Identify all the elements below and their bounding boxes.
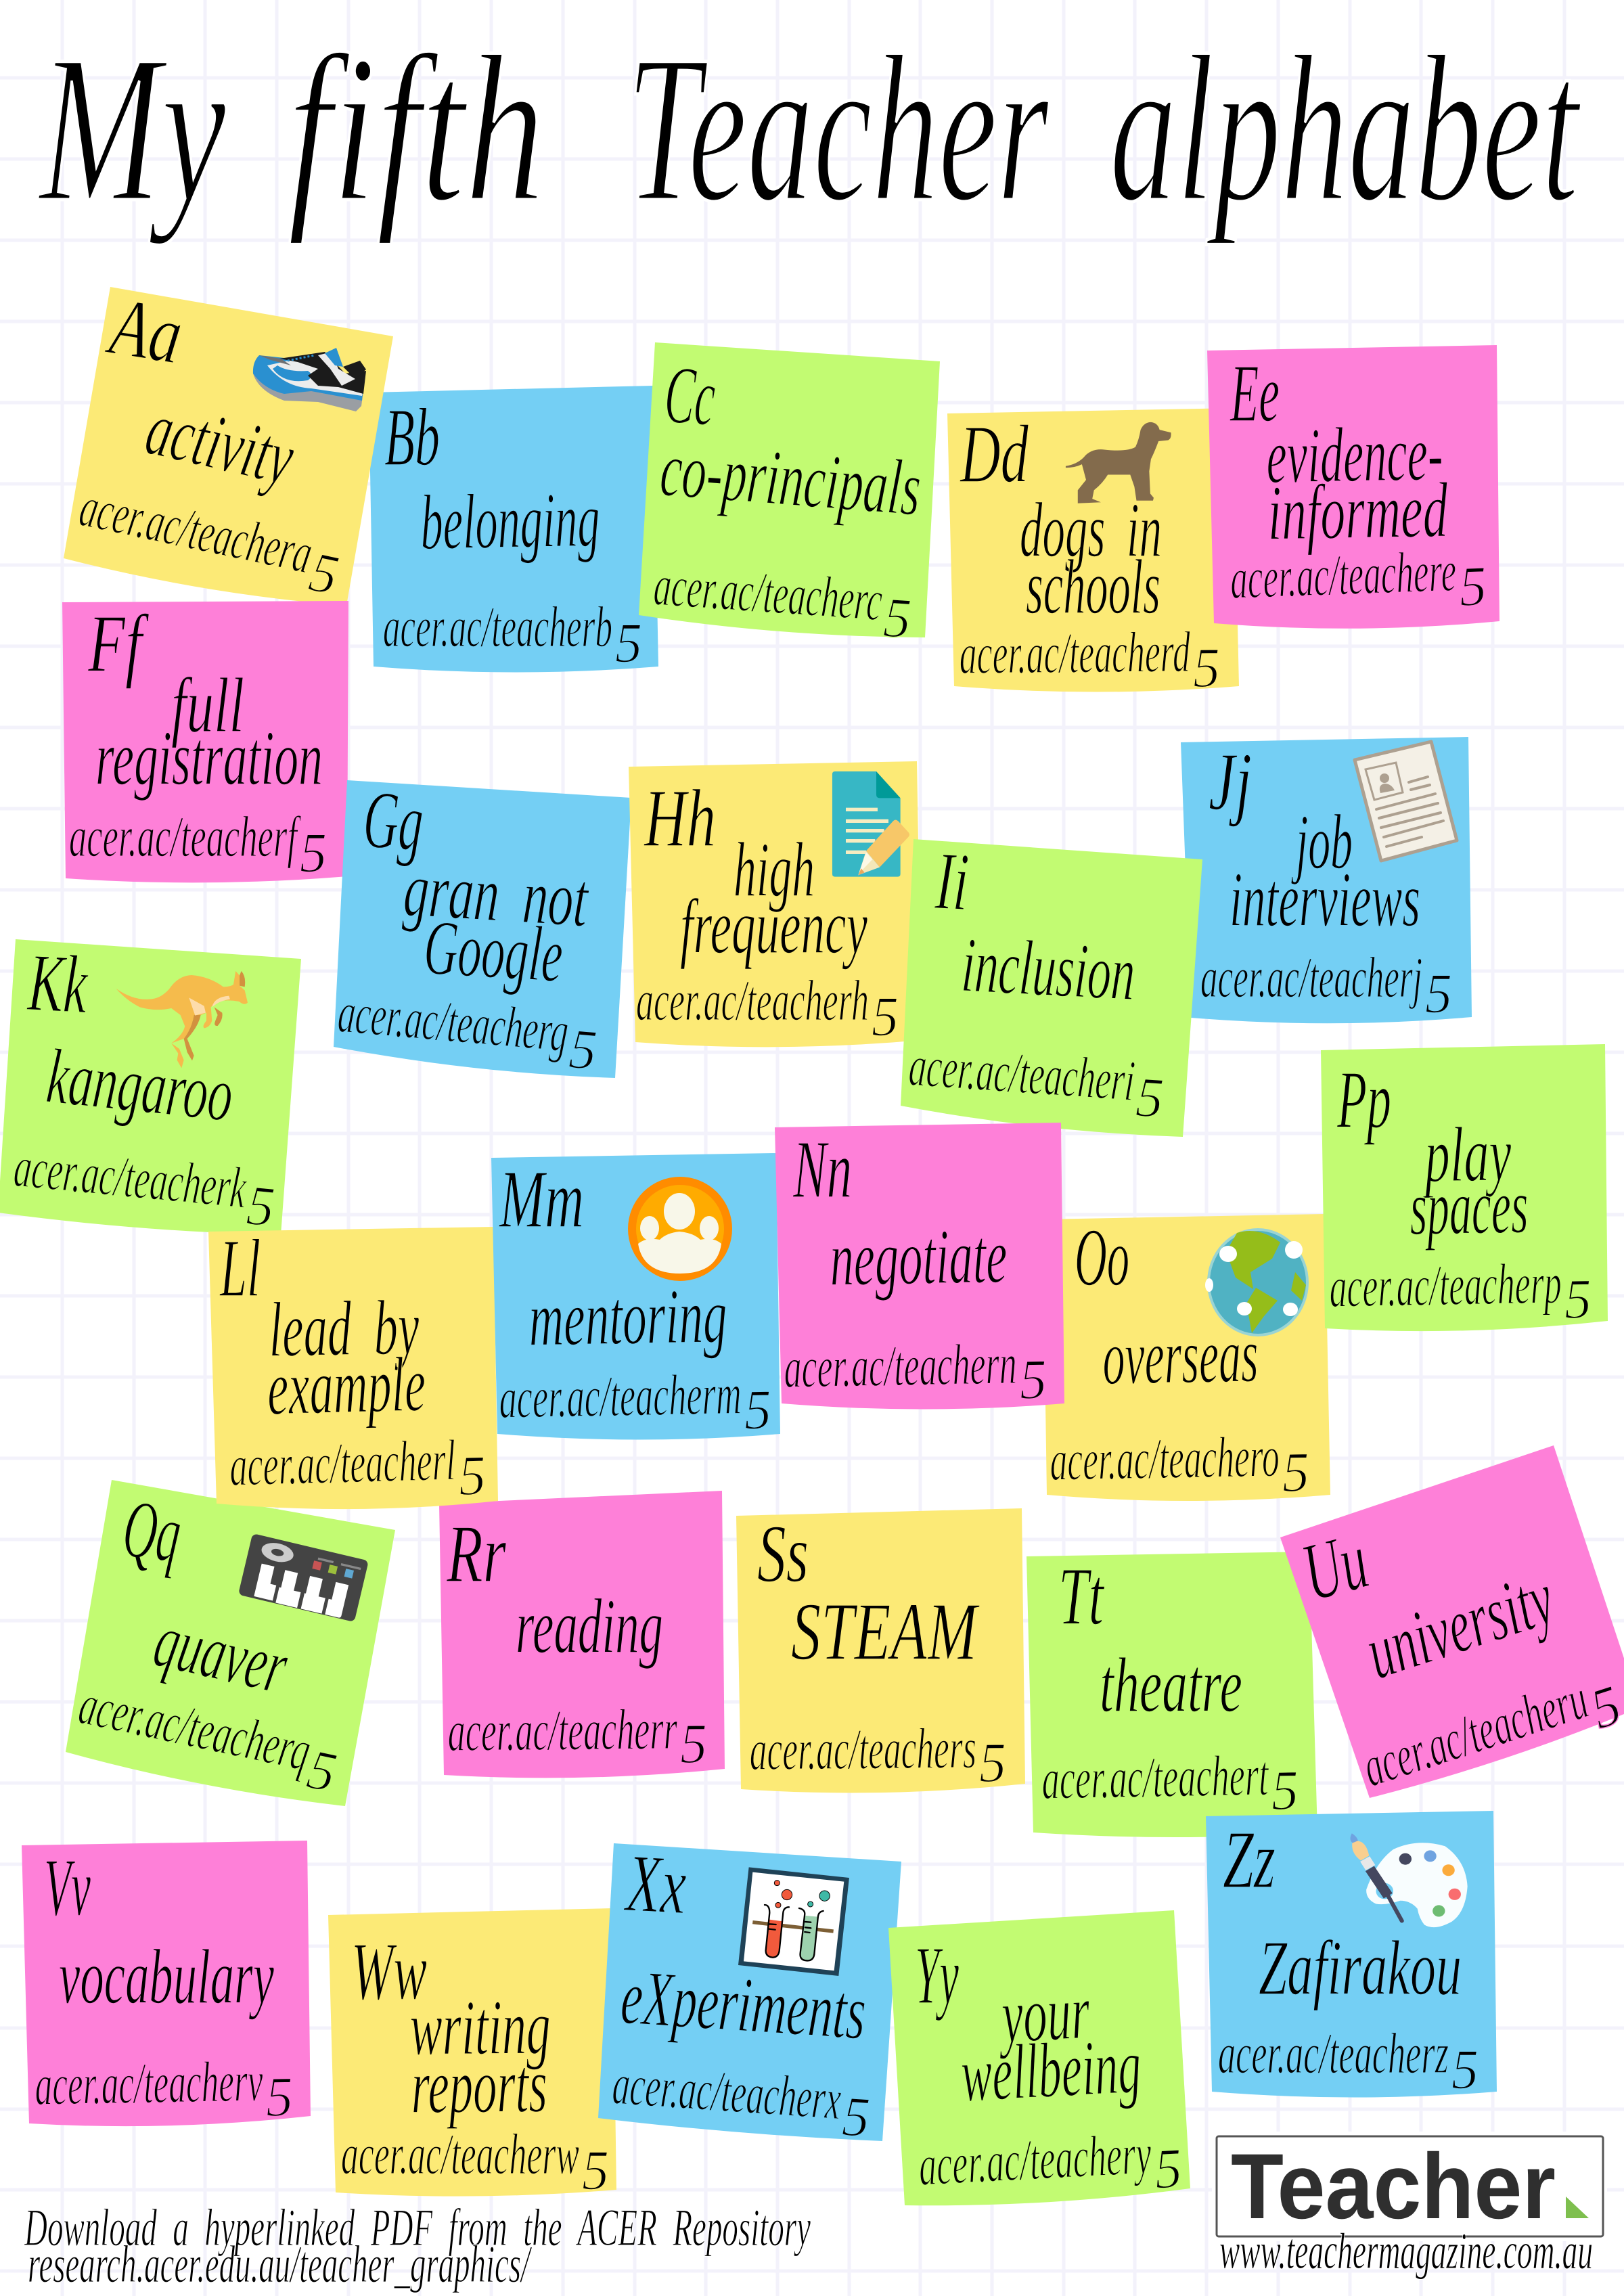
- note W: writing reports: [328, 1908, 616, 2202]
- note F: full registration: [62, 598, 348, 884]
- link c: acer.ac/teacherc: [652, 552, 884, 633]
- word job: job: [1291, 799, 1353, 886]
- icon: dog: [1066, 422, 1171, 503]
- letter Kk: Kk: [25, 937, 91, 1031]
- letter Mm: Mm: [499, 1154, 584, 1245]
- word eXperiments: eXperiments: [618, 1954, 869, 2056]
- word co-principals: co-principals: [657, 426, 924, 533]
- letter Ww: Ww: [351, 1926, 427, 2017]
- link w: 5: [582, 2139, 609, 2202]
- title: [37, 12, 1583, 246]
- letter Rr: Rr: [446, 1508, 506, 1600]
- link h: 5: [872, 985, 899, 1048]
- icon: paint palette: [1350, 1833, 1468, 1927]
- link g: 5: [567, 1017, 600, 1082]
- note G: gran not Google: [334, 773, 631, 1082]
- link a: [71, 474, 347, 607]
- note X: eXperiments: [598, 1837, 901, 2150]
- letter Dd: Dd: [960, 409, 1029, 500]
- link m: 5: [744, 1378, 772, 1442]
- note C: co-principals: [639, 342, 940, 651]
- word evidence-: evidence-: [1265, 410, 1444, 500]
- link i: 5: [1134, 1066, 1165, 1130]
- link q: acer.ac/teacherq: [74, 1671, 316, 1783]
- note D: dogs in schools: [947, 408, 1239, 702]
- title: fifth: [288, 12, 545, 246]
- link i: [906, 1033, 1167, 1130]
- word Google: Google: [422, 904, 565, 999]
- link x: 5: [840, 2085, 872, 2150]
- word schools: schools: [1026, 544, 1160, 631]
- icon: globe: [1205, 1230, 1307, 1335]
- link e: 5: [1458, 555, 1487, 618]
- link g: [334, 979, 601, 1082]
- link t: [1041, 1742, 1299, 1826]
- word dogs in: dogs in: [1020, 487, 1162, 574]
- title: Teacher: [627, 12, 1051, 246]
- note O: overseas: [1043, 1212, 1330, 1508]
- link l: 5: [458, 1444, 487, 1508]
- link f: [69, 804, 327, 884]
- link e: acer.ac/teachere: [1229, 538, 1458, 611]
- note P: play spaces: [1321, 1044, 1608, 1335]
- link d: acer.ac/teacherd: [959, 619, 1191, 686]
- note V: vocabulary: [22, 1841, 311, 2133]
- link i: acer.ac/teacheri: [907, 1033, 1137, 1113]
- link m: [499, 1361, 772, 1446]
- link j: [1200, 945, 1452, 1025]
- word STEAM: STEAM: [791, 1586, 980, 1678]
- letter Zz: Zz: [1223, 1814, 1276, 1906]
- note E: evidence-informed: [1207, 345, 1499, 629]
- icon: kangaroo: [116, 971, 248, 1068]
- note S: STEAM: [736, 1508, 1025, 1797]
- link z: 5: [1451, 2038, 1479, 2101]
- letter Yy: Yy: [915, 1930, 959, 2021]
- word activity: activity: [139, 384, 302, 502]
- link x: [610, 2051, 873, 2150]
- link y: [917, 2119, 1183, 2213]
- link e: [1229, 537, 1487, 627]
- link y: acer.ac/teachery: [917, 2121, 1153, 2198]
- letter Jj: Jj: [1209, 736, 1252, 828]
- icon: resume: [1355, 742, 1457, 861]
- note R: reading: [439, 1491, 725, 1778]
- word mentoring: mentoring: [528, 1273, 728, 1363]
- link l: [229, 1426, 487, 1514]
- icon: test tubes: [738, 1867, 849, 1976]
- letter Oo: Oo: [1075, 1212, 1129, 1303]
- letter Uu: Uu: [1293, 1514, 1377, 1619]
- logo: Teacher magazine: Teacher: [1231, 2135, 1556, 2238]
- link h: acer.ac/teacherh: [636, 968, 869, 1033]
- note M: mentoring: [491, 1153, 780, 1446]
- link c: [651, 552, 914, 651]
- icon: running shoe: [253, 348, 366, 411]
- word frequency: frequency: [680, 884, 867, 970]
- link k: acer.ac/teacherk: [12, 1133, 250, 1221]
- word registration: registration: [95, 715, 323, 802]
- link s: 5: [979, 1732, 1006, 1795]
- link j: 5: [1425, 962, 1452, 1025]
- word full: full: [171, 662, 244, 749]
- word informed: informed: [1267, 467, 1449, 557]
- link g: acer.ac/teacherg: [336, 979, 571, 1064]
- link r: [447, 1696, 707, 1778]
- link k: 5: [244, 1174, 277, 1239]
- link z: [1218, 2021, 1479, 2101]
- word quaver: quaver: [147, 1596, 296, 1711]
- note H: high frequency: [629, 761, 922, 1048]
- link m: acer.ac/teacherm: [499, 1361, 742, 1431]
- link v: 5: [265, 2065, 294, 2129]
- word inclusion: inclusion: [960, 922, 1137, 1017]
- letter Cc: Cc: [662, 348, 718, 443]
- word overseas: overseas: [1102, 1312, 1259, 1401]
- word negotiate: negotiate: [829, 1213, 1008, 1303]
- link j: acer.ac/teacherj: [1200, 945, 1422, 1010]
- note J: job interviews: [1181, 736, 1472, 1025]
- link k: [9, 1133, 279, 1239]
- note Y: your wellbeing: [888, 1910, 1190, 2213]
- note Q: quaver: [66, 1480, 395, 1806]
- link s: [749, 1715, 1006, 1797]
- footer: download note: [24, 2198, 811, 2293]
- link x: acer.ac/teacherx: [610, 2051, 843, 2132]
- word reports: reports: [411, 2042, 547, 2130]
- letter Nn: Nn: [792, 1124, 852, 1215]
- note N: negotiate: [775, 1123, 1064, 1416]
- letter Ee: Ee: [1230, 348, 1280, 439]
- note T: theatre: [1027, 1551, 1317, 1837]
- word high: high: [734, 827, 815, 914]
- footer: download note: Download a hyperlinked PDF from the ACER Repository: [24, 2198, 811, 2257]
- link v: acer.ac/teacherv: [35, 2048, 264, 2117]
- note I: inclusion: [901, 835, 1202, 1137]
- letter Aa: Aa: [101, 279, 189, 382]
- link b: [383, 594, 642, 675]
- link f: acer.ac/teacherf: [69, 804, 301, 869]
- letter Pp: Pp: [1336, 1054, 1391, 1146]
- footer: download note: research.acer.edu.au/teacher_graphics/: [28, 2234, 533, 2293]
- link c: 5: [882, 586, 913, 651]
- letter Tt: Tt: [1058, 1551, 1105, 1642]
- letter Hh: Hh: [644, 773, 716, 864]
- letter Ss: Ss: [757, 1508, 809, 1600]
- letter Vv: Vv: [44, 1842, 91, 1933]
- link l: acer.ac/teacherl: [229, 1427, 457, 1498]
- word reading: reading: [516, 1583, 663, 1670]
- note L: lead by example: [208, 1223, 498, 1514]
- link n: [784, 1330, 1047, 1416]
- link z: acer.ac/teacherz: [1218, 2021, 1449, 2086]
- word belonging: belonging: [420, 476, 601, 566]
- link o: 5: [1282, 1441, 1310, 1504]
- link q: [70, 1671, 345, 1805]
- link w: acer.ac/teacherw: [341, 2121, 579, 2186]
- letter Ll: Ll: [219, 1223, 261, 1314]
- link t: acer.ac/teachert: [1041, 1742, 1270, 1811]
- link t: 5: [1271, 1759, 1299, 1822]
- icon: people circle: [628, 1177, 732, 1281]
- link v: [35, 2048, 294, 2133]
- icon: document and pencil: [832, 771, 909, 877]
- link o: [1050, 1423, 1310, 1508]
- word writing: writing: [409, 1984, 551, 2072]
- link a: acer.ac/teachera: [74, 474, 318, 586]
- word your: your: [995, 1968, 1092, 2060]
- link b: 5: [615, 612, 642, 675]
- letter Bb: Bb: [384, 392, 440, 483]
- link p: 5: [1564, 1267, 1592, 1331]
- link q: 5: [302, 1738, 342, 1805]
- note U: university: [1280, 1445, 1624, 1814]
- word interviews: interviews: [1230, 857, 1420, 943]
- word gran not: gran not: [401, 846, 591, 944]
- word Zafirakou: Zafirakou: [1259, 1925, 1462, 2012]
- title: My: [37, 12, 227, 246]
- link s: acer.ac/teachers: [749, 1715, 976, 1782]
- link r: acer.ac/teacherr: [447, 1696, 678, 1763]
- link a: 5: [304, 540, 344, 607]
- link h: [636, 968, 899, 1048]
- word wellbeing: wellbeing: [959, 2023, 1143, 2119]
- link f: 5: [300, 821, 327, 884]
- link w: [341, 2121, 609, 2202]
- link b: acer.ac/teacherb: [383, 594, 612, 659]
- note K: kangaroo: [0, 937, 301, 1239]
- word vocabulary: vocabulary: [59, 1934, 274, 2021]
- letter Ii: Ii: [933, 835, 971, 928]
- word lead by: lead by: [268, 1284, 420, 1374]
- letter Gg: Gg: [361, 773, 426, 868]
- note A: activity: [64, 279, 393, 607]
- letter Qq: Qq: [118, 1483, 186, 1580]
- link o: acer.ac/teachero: [1050, 1424, 1280, 1493]
- note Z: Zafirakou: [1206, 1811, 1497, 2101]
- word spaces: spaces: [1409, 1163, 1529, 1252]
- link d: 5: [1193, 637, 1220, 700]
- word play: play: [1421, 1111, 1512, 1199]
- link r: 5: [680, 1713, 707, 1776]
- link y: 5: [1153, 2137, 1183, 2201]
- icon: keyboard: [238, 1533, 369, 1622]
- letter Xx: Xx: [622, 1837, 689, 1932]
- letter Ff: Ff: [87, 598, 149, 690]
- link n: 5: [1019, 1348, 1047, 1412]
- word kangaroo: kangaroo: [43, 1033, 238, 1139]
- word example: example: [266, 1341, 427, 1432]
- note B: belonging: [369, 386, 658, 675]
- word theatre: theatre: [1100, 1642, 1242, 1729]
- link d: [959, 619, 1220, 702]
- link n: acer.ac/teachern: [784, 1331, 1017, 1400]
